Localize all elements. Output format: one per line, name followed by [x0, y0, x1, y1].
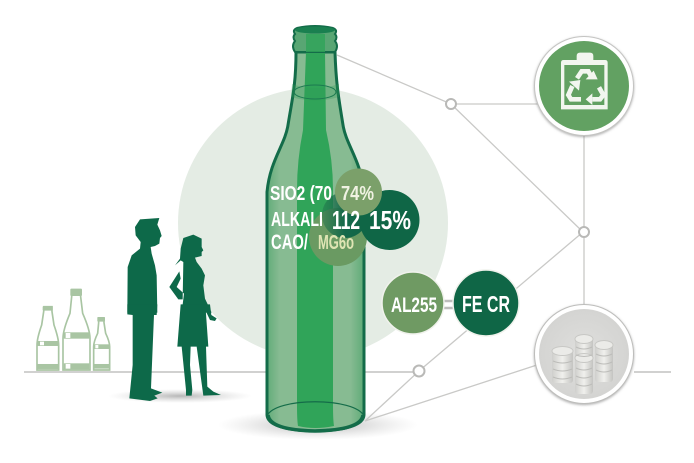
- bubble: Fe Cr: [453, 270, 519, 336]
- right coin stack: [595, 340, 613, 382]
- bubble: Al2O3: [382, 272, 444, 334]
- bottle lip: [295, 26, 335, 34]
- bubble: 74%: [335, 168, 382, 216]
- small bottles group: [37, 289, 110, 370]
- left small bottle: [37, 306, 59, 370]
- bubble: Fe Cr: FE CR: [462, 291, 510, 317]
- bubble: 15%: [360, 190, 420, 250]
- woman upper body: [169, 235, 212, 313]
- woman silhouette: [169, 235, 221, 396]
- right small bottle: [94, 317, 110, 370]
- man legs: [127, 304, 162, 401]
- bottle neck stripe: [306, 34, 325, 52]
- composition bubbles: [270, 168, 420, 266]
- green bottle: [267, 26, 364, 431]
- clipboard outline: [561, 53, 608, 109]
- dark bubble behind 112: [322, 192, 368, 238]
- rear coin stack: [575, 334, 593, 363]
- middle bottle: [63, 289, 90, 370]
- bottle base ellipse: [267, 402, 364, 416]
- text: alkali: ALKALI: [271, 209, 323, 231]
- connector network: [337, 55, 584, 421]
- bottle neck rings: [293, 26, 337, 52]
- bottle base thick edge: [268, 415, 363, 431]
- connector nodes: [414, 99, 589, 376]
- centre highlight stripe: [297, 52, 334, 428]
- man silhouette: [127, 218, 162, 401]
- woman skirt and legs: [177, 304, 221, 396]
- woman forearm: [203, 304, 217, 321]
- bottle neck ellipse: [294, 85, 336, 99]
- text: MgO: MG6o: [318, 232, 354, 254]
- text: 112: 112: [332, 205, 360, 235]
- bubble: MgO: [309, 208, 367, 266]
- text: SiO2: SIO2 (70: [270, 183, 332, 205]
- bubble: Al2O3: AL255: [391, 294, 437, 317]
- background circle: [178, 88, 448, 358]
- recycling arrows: [568, 71, 603, 99]
- front coin stack: [575, 354, 593, 394]
- icon: coin stacks: [534, 304, 634, 404]
- text: 74%: 74%: [341, 183, 374, 205]
- text: 15%: 15%: [369, 205, 411, 235]
- bottle body: [267, 52, 364, 431]
- ground line: [24, 371, 671, 373]
- icon: recycling container: [534, 36, 634, 136]
- ground shadows: [108, 389, 418, 440]
- left coin stack: [552, 346, 573, 383]
- text: CaO: CAO/: [271, 231, 308, 254]
- man upper body: [127, 218, 162, 313]
- bottle shoulder stripe: [291, 84, 339, 100]
